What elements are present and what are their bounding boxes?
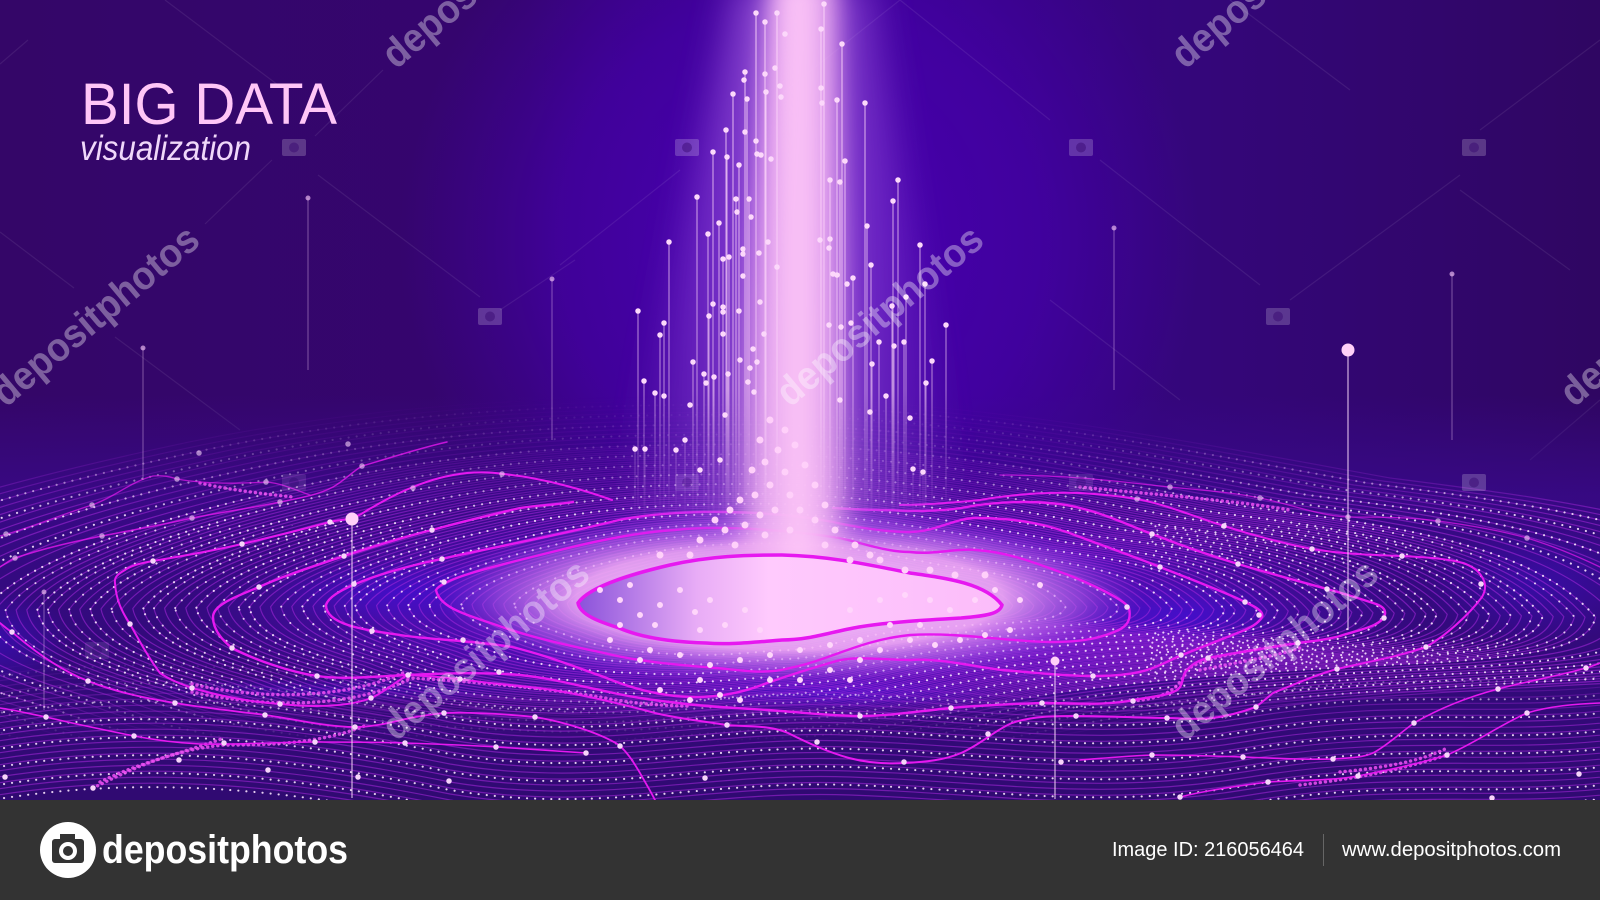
beam particles	[600, 4, 1040, 700]
dotted contour rows	[0, 406, 1600, 740]
particle dots	[635, 4, 946, 472]
footer bar	[0, 800, 1600, 900]
side dotted rows	[4, 525, 1575, 690]
terrain center glow	[226, 510, 1374, 717]
image id: Image ID: 216056464	[1112, 839, 1304, 861]
footer logo	[40, 822, 348, 878]
contour nodes	[5, 444, 1586, 798]
inner data disc	[578, 555, 1002, 644]
website: www.depositphotos.com	[1341, 839, 1561, 861]
data terrain	[0, 395, 1600, 831]
dots over disc	[600, 585, 1040, 700]
particle stems	[635, 4, 946, 530]
terrain base	[0, 395, 1600, 800]
magenta contour lines	[0, 442, 1600, 800]
central pink glow	[435, 509, 1145, 685]
pin stems	[44, 198, 1452, 710]
dot cluster under beam	[660, 420, 985, 575]
title	[82, 83, 337, 160]
side data pins	[44, 198, 1452, 799]
footer logo: depositphotos	[102, 828, 348, 872]
blue glow pools	[0, 525, 1600, 710]
heading: BIG DATA	[81, 72, 337, 137]
background	[0, 0, 1600, 544]
light beam	[630, 0, 944, 556]
dense magenta dot bands	[93, 483, 1447, 788]
lower dotted wave rows	[3, 664, 1595, 800]
lower wave lines	[0, 665, 1600, 800]
fine contour lines	[0, 428, 1600, 731]
pin heads	[44, 198, 1452, 592]
subheading: visualization	[80, 129, 251, 168]
